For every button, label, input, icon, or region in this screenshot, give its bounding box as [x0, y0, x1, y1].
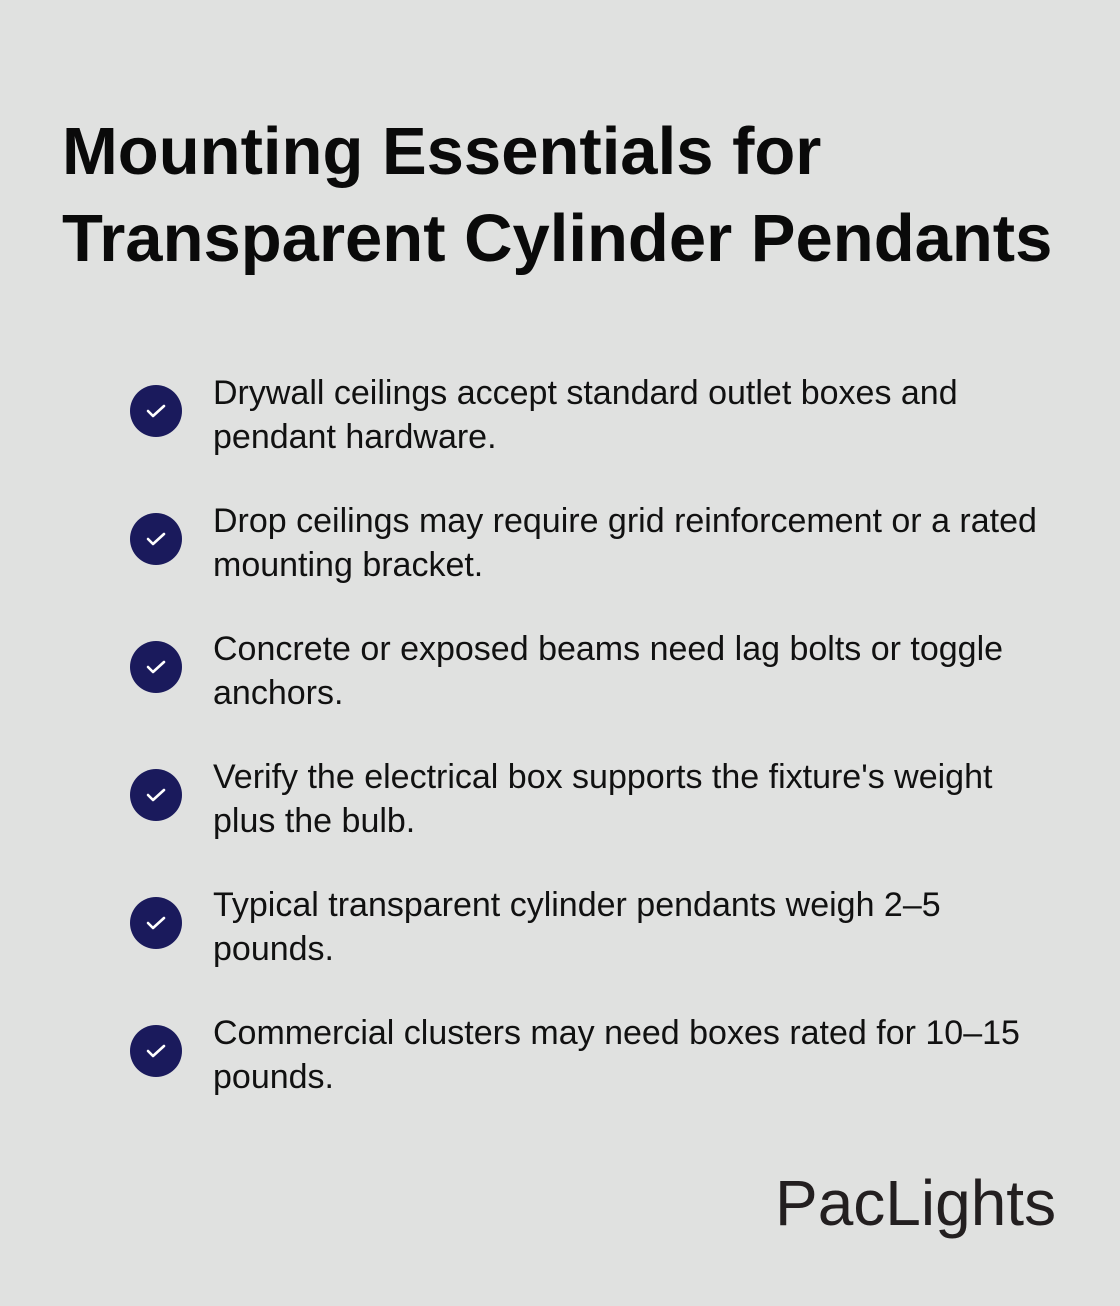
- icon: check: [130, 1025, 182, 1077]
- text: Verify the electrical box supports the fixture's weight: [213, 758, 992, 796]
- title: Mounting Essentials for: [62, 114, 821, 189]
- text: [213, 502, 1037, 584]
- item 2: [130, 502, 1037, 584]
- icon: check: [130, 385, 182, 437]
- item 3: [130, 630, 1003, 712]
- icon: check: [130, 513, 182, 565]
- text: [213, 630, 1003, 712]
- text: [213, 758, 992, 840]
- icon: check: [130, 769, 182, 821]
- text: mounting bracket.: [213, 546, 483, 584]
- item 6: [130, 1014, 1020, 1096]
- text: [213, 374, 958, 456]
- text: Drywall ceilings accept standard outlet boxes and: [213, 374, 958, 412]
- text: pendant hardware.: [213, 418, 497, 456]
- text: Typical transparent cylinder pendants weigh 2–5: [213, 886, 941, 924]
- text: anchors.: [213, 674, 343, 712]
- text: Commercial clusters may need boxes rated for 10–15: [213, 1014, 1020, 1052]
- icon: check: [130, 897, 182, 949]
- icon: check: [130, 641, 182, 693]
- title: Transparent Cylinder Pendants: [62, 201, 1052, 276]
- text: Drop ceilings may require grid reinforcement or a rated: [213, 502, 1037, 540]
- text: pounds.: [213, 1058, 334, 1096]
- text: [213, 1014, 1020, 1096]
- text: [213, 886, 941, 968]
- text: plus the bulb.: [213, 802, 415, 840]
- text: Concrete or exposed beams need lag bolts or toggle: [213, 630, 1003, 668]
- text: pounds.: [213, 930, 334, 968]
- logo: PacLights: [775, 1167, 1056, 1239]
- item 5: [130, 886, 941, 968]
- title: [62, 114, 1052, 276]
- item 4: [130, 758, 992, 840]
- item 1: [130, 374, 958, 456]
